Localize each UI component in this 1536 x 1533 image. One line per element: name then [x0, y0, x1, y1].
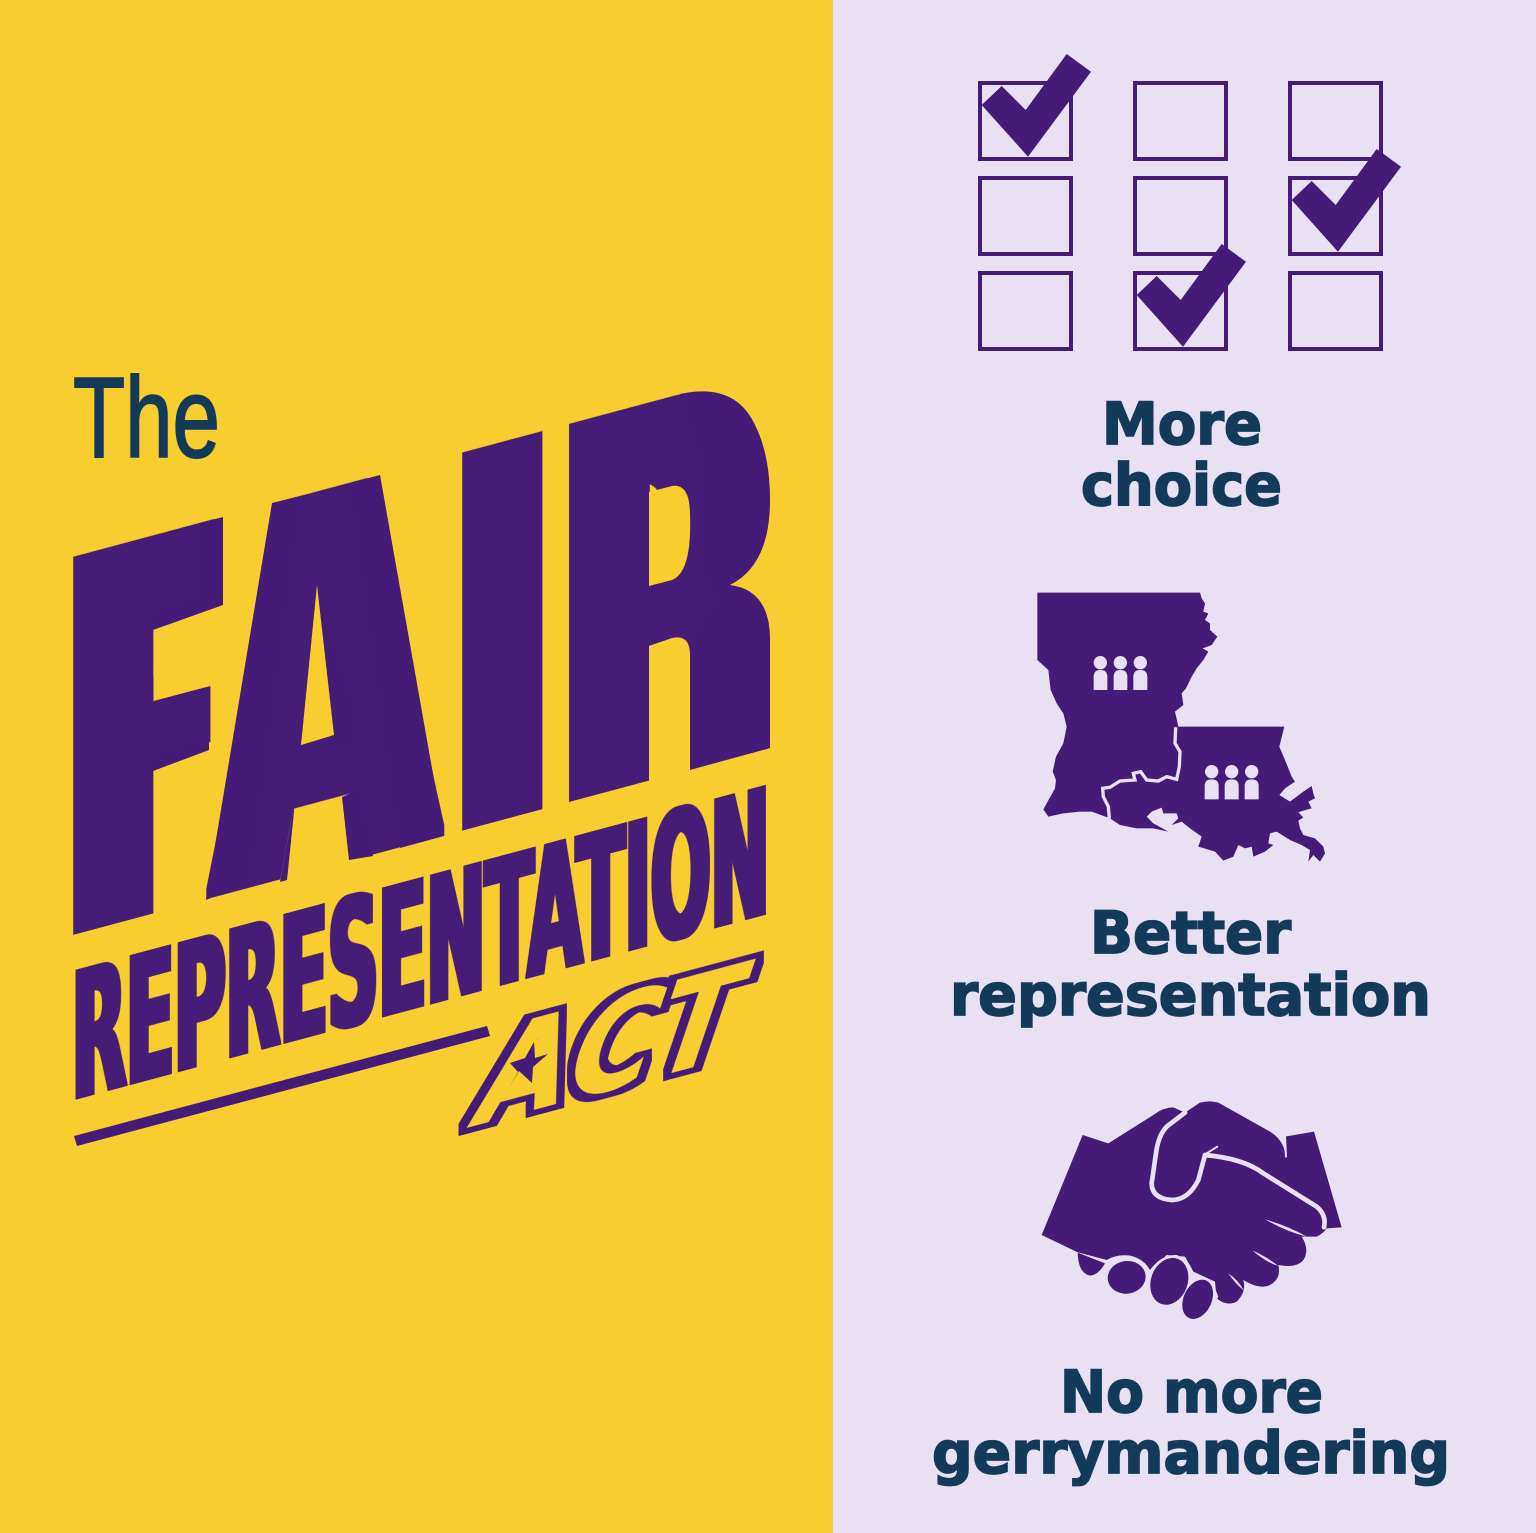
- heading: FAIR: I: [467, 338, 538, 944]
- icon: people group west: [1094, 656, 1147, 690]
- label: No more gerrymandering: [932, 1358, 1450, 1487]
- label: More choice: More: [1102, 390, 1262, 458]
- heading: The: The: [73, 355, 220, 482]
- heading: FAIR: A: [215, 363, 438, 1012]
- heading: FAIR: F: [78, 426, 208, 1049]
- label: More choice: [1081, 390, 1282, 519]
- panel: yellow title background: [0, 0, 833, 1533]
- label: Better representation: [950, 899, 1431, 1029]
- label: More choice: choice: [1081, 451, 1282, 519]
- icon: ballot checkboxes: [980, 54, 1401, 349]
- label: No more gerrymandering: No more: [1060, 1358, 1323, 1426]
- heading: REPRESENTATION: REPRESENTATION: [72, 749, 769, 1142]
- heading: FAIR: R: [563, 279, 756, 918]
- icon: fingers: [1078, 1253, 1219, 1324]
- underline rule: [74, 1026, 490, 1146]
- icon: people group east: [1205, 765, 1259, 799]
- heading: FAIR: [78, 278, 770, 1049]
- label: No more gerrymandering: gerrymandering: [932, 1419, 1450, 1487]
- panel: lavender benefits background: [833, 0, 1536, 1533]
- heading: ACT: ACT: [455, 930, 766, 1161]
- icon: star in A: [509, 1042, 548, 1088]
- icon: Louisiana map split in two districts: [1037, 593, 1325, 862]
- label: Better representation: Better: [1090, 899, 1291, 967]
- label: Better representation: representation: [950, 961, 1431, 1029]
- title: The Fair Representation Act: [72, 278, 770, 1161]
- icon: handshake: [1042, 1101, 1342, 1324]
